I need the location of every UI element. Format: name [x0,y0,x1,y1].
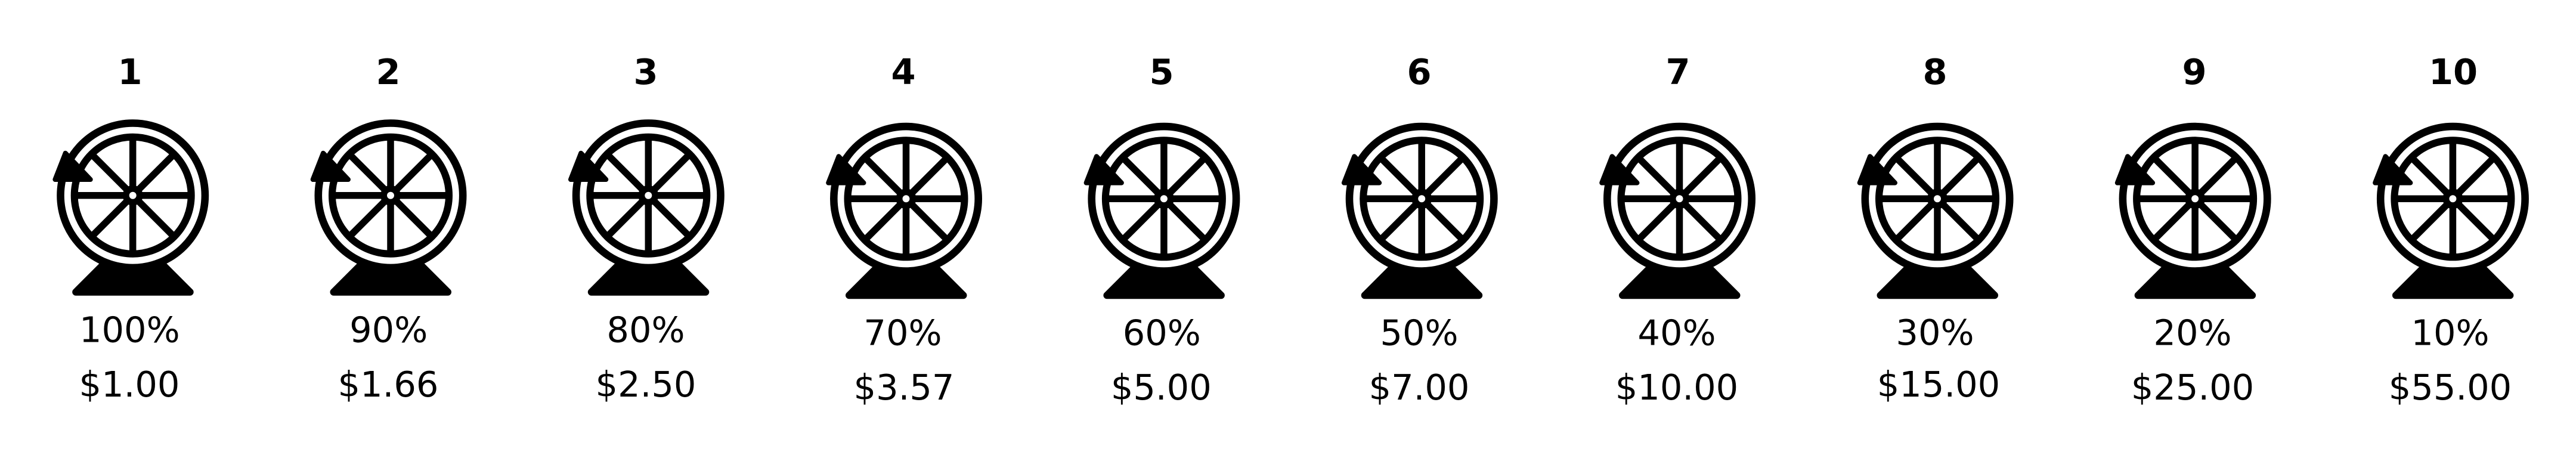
icon: wheel 9 [2117,126,2267,295]
price $5.00: $5.00 [1111,367,1212,408]
percent 20%: 20% [2153,312,2232,353]
number 10: 10 [2429,51,2478,92]
price $2.50: $2.50 [596,364,696,405]
percent 90%: 90% [349,309,428,351]
price $1.00: $1.00 [79,364,179,405]
percent 50%: 50% [1380,312,1459,353]
column 10 [2375,51,2525,408]
column 2 [313,51,463,405]
number 9: 9 [2182,51,2207,92]
number 7: 7 [1665,51,1690,92]
price $15.00: $15.00 [1877,364,2000,405]
icon: wheel 10 [2375,126,2525,295]
icon: wheel 3 [571,123,720,292]
percent 10%: 10% [2411,312,2490,353]
icon: wheel 2 [313,123,463,292]
percent 40%: 40% [1637,312,1716,353]
number 8: 8 [1922,51,1948,92]
price $55.00: $55.00 [2389,367,2512,408]
percent 30%: 30% [1896,312,1974,353]
price $1.66: $1.66 [338,364,438,405]
column 3 [571,51,720,405]
price $25.00: $25.00 [2131,367,2254,408]
column 7 [1602,51,1752,408]
icon: wheel 8 [1860,126,2010,295]
column 1 [55,51,205,405]
icon: wheel 6 [1344,126,1494,295]
icon: wheel 1 [55,123,205,292]
price $7.00: $7.00 [1369,367,1469,408]
price $3.57: $3.57 [854,367,954,408]
icon: wheel 7 [1602,126,1752,295]
column 6 [1344,51,1494,408]
number 2: 2 [376,51,401,92]
column 4 [828,51,979,408]
percent 60%: 60% [1123,312,1201,353]
number 3: 3 [633,51,658,92]
column 9 [2117,51,2267,408]
column 8 [1860,51,2010,405]
column 5 [1086,51,1236,408]
icon: wheel 4 [828,126,979,295]
percent 100%: 100% [79,309,180,351]
number 5: 5 [1149,51,1174,92]
price $10.00: $10.00 [1615,367,1738,408]
icon: wheel 5 [1086,126,1236,295]
number 1: 1 [117,51,143,92]
percent 70%: 70% [863,312,942,353]
number 6: 6 [1407,51,1432,92]
percent 80%: 80% [606,309,685,351]
number 4: 4 [891,51,916,92]
